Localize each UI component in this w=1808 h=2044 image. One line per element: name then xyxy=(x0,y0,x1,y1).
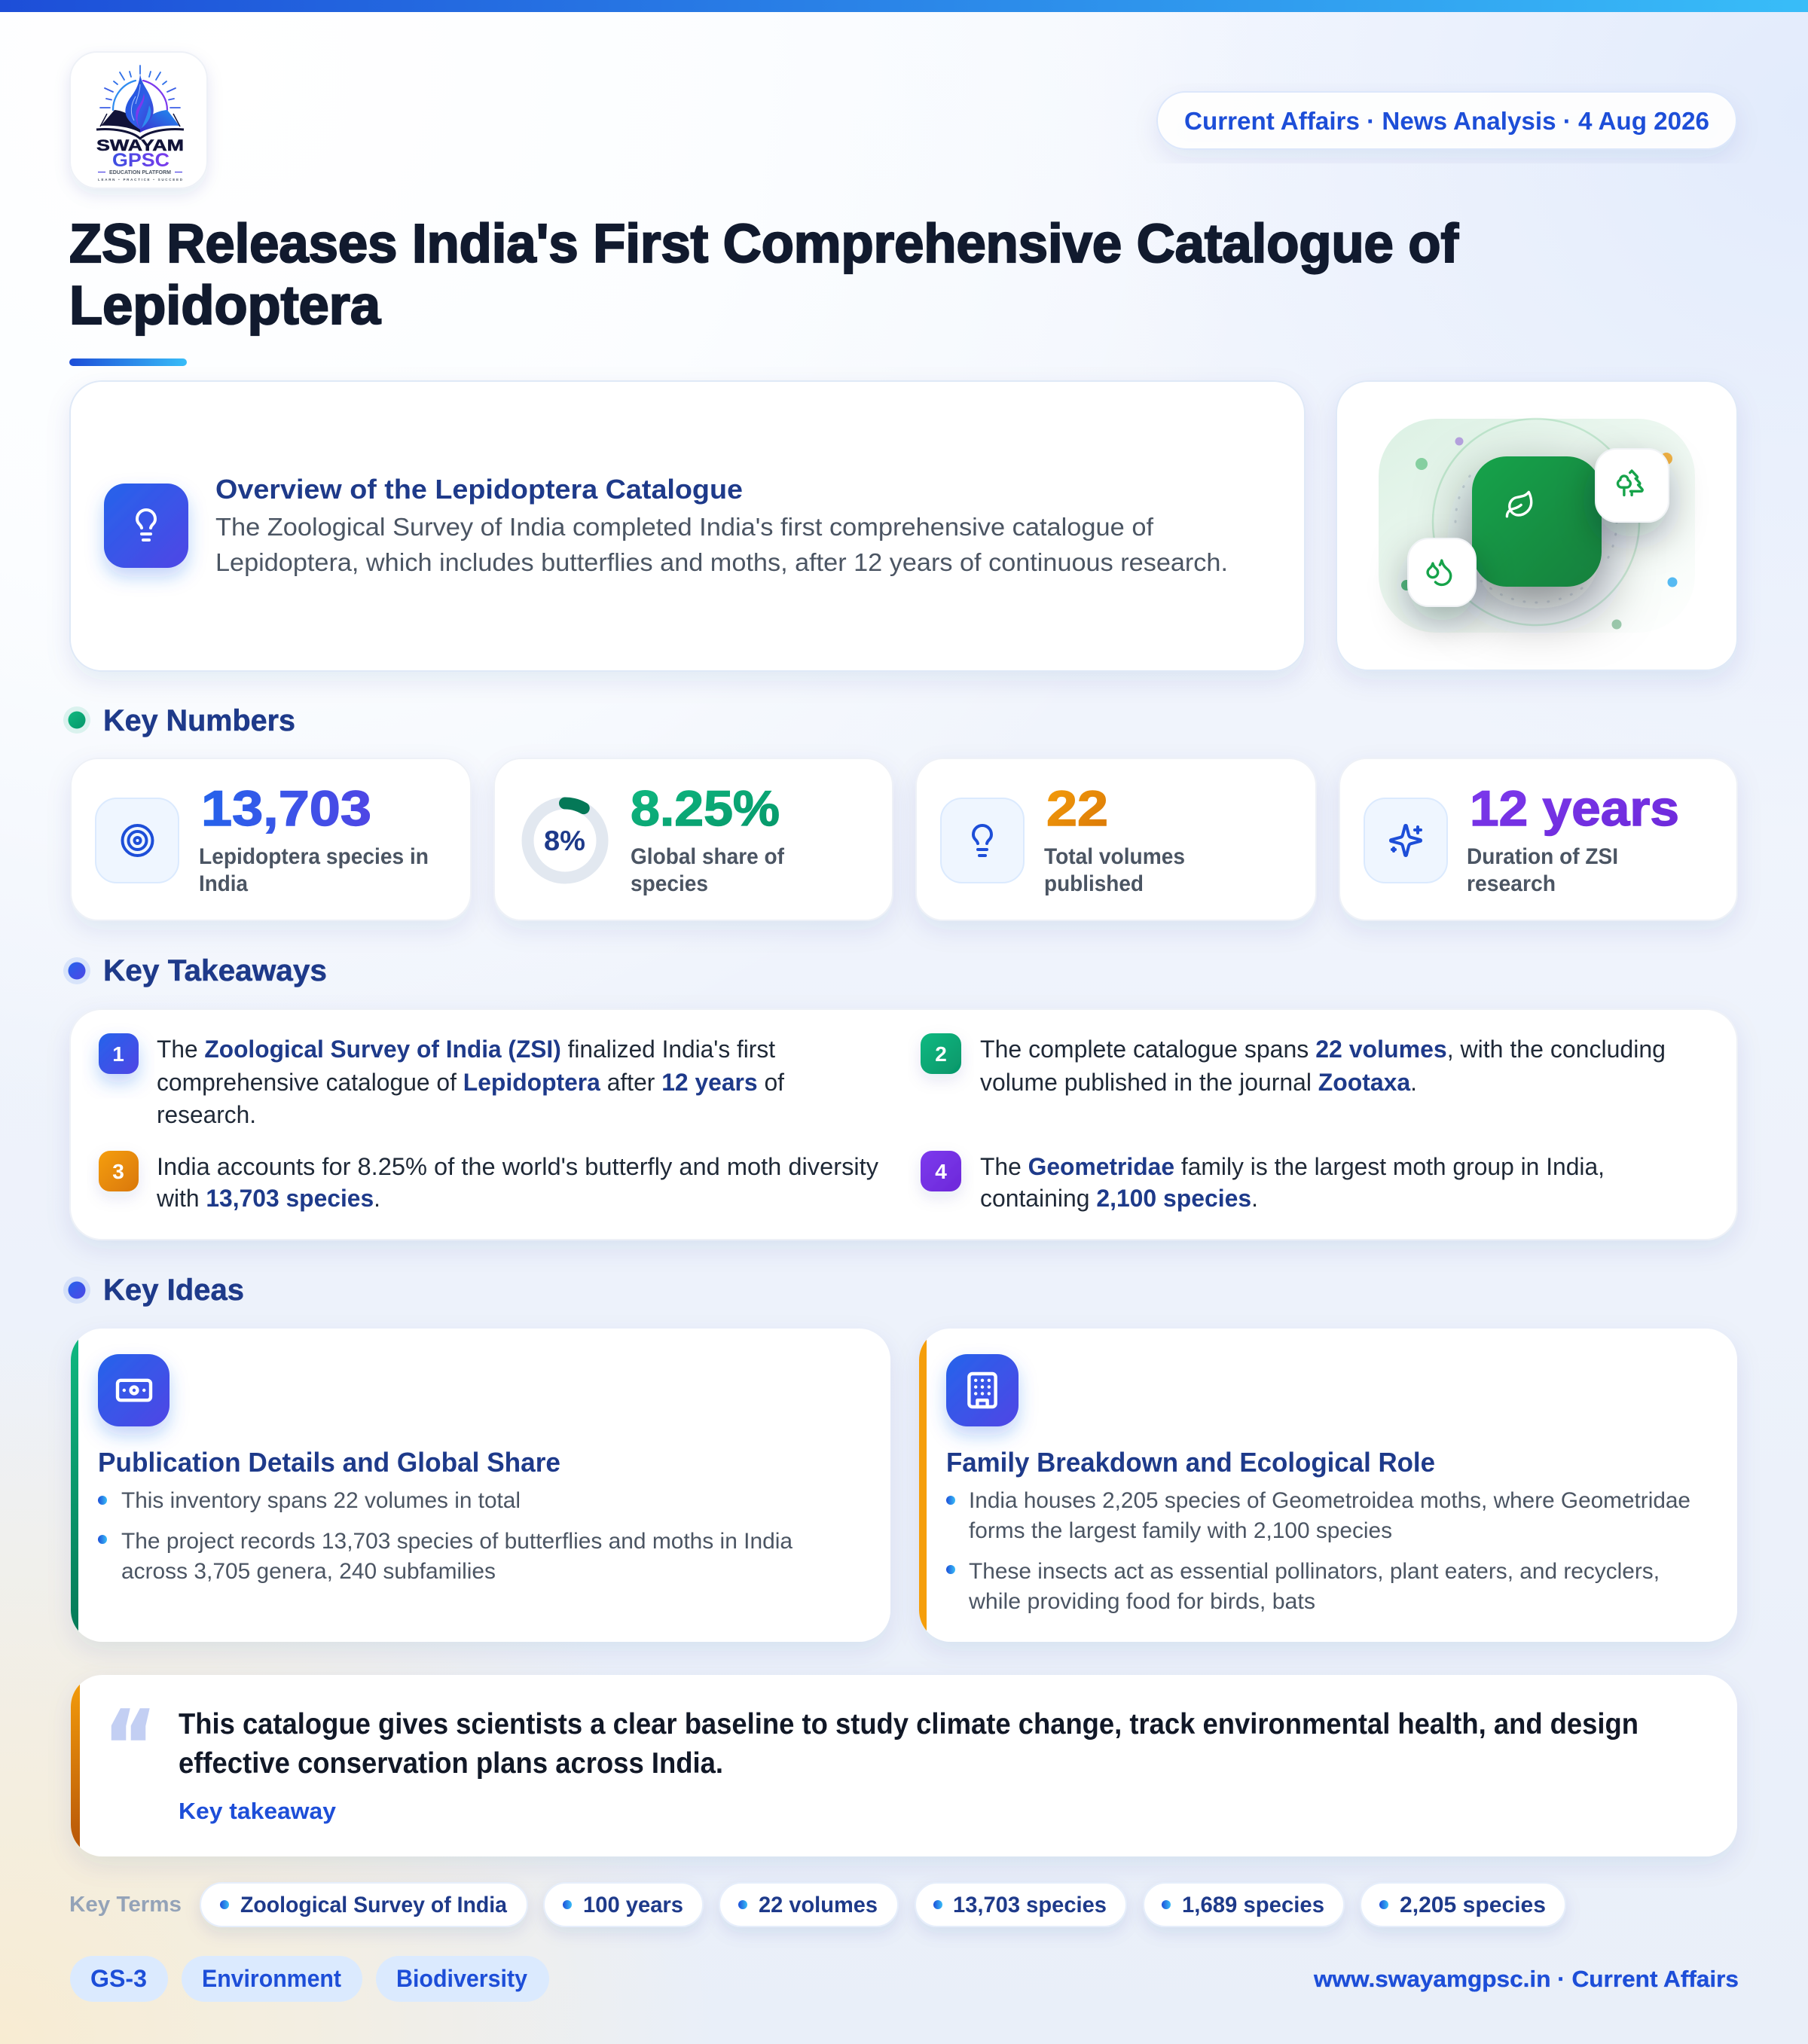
logo wordmark: SWAYAM xyxy=(96,137,184,154)
footer source line: www.swayamgpsc.in · Current Affairs xyxy=(1313,1966,1739,1992)
panel: family breakdown xyxy=(919,1329,1737,1642)
tag: Environment xyxy=(182,1956,362,2002)
value: 22 xyxy=(1046,780,1108,836)
icon: light bulb xyxy=(104,484,188,568)
icon: sun rays xyxy=(100,66,180,110)
logo wordmark: GPSC xyxy=(112,150,170,171)
label xyxy=(631,844,785,896)
logo card xyxy=(70,52,207,188)
quote text: This catalogue gives scientists a clear baseline to study climate change, track environmental health, and design xyxy=(179,1708,1638,1740)
label: research xyxy=(1467,871,1556,896)
bullet list: across 3,705 genera, 240 subfamilies xyxy=(121,1559,496,1584)
stat card: volumes xyxy=(916,758,1316,920)
icon: sparkles xyxy=(1364,798,1447,883)
water drops tile xyxy=(1408,538,1476,606)
stat card: global share xyxy=(494,758,893,920)
value: 12 years xyxy=(1470,780,1679,836)
heading: key numbers: Key Numbers xyxy=(103,704,295,737)
date pill xyxy=(1157,92,1736,149)
icon: open book xyxy=(96,110,184,139)
term chip: 100 years xyxy=(583,1893,683,1917)
term chip xyxy=(1144,1883,1344,1927)
key terms label: Key Terms xyxy=(69,1893,182,1917)
accent strip xyxy=(71,1684,80,1847)
icon: quotation mark: “ xyxy=(104,1691,156,1803)
takeaway 3 xyxy=(99,1151,878,1212)
takeaway 2: The complete catalogue spans 22 volumes, with the concluding xyxy=(980,1036,1666,1063)
tag: Environment: Environment xyxy=(202,1965,341,1992)
takeaway 1: 1 xyxy=(112,1042,124,1066)
bullet list xyxy=(946,1488,1690,1614)
label: India xyxy=(199,871,248,896)
overview body: The Zoological Survey of India completed India's first comprehensive catalogue of xyxy=(215,513,1154,541)
takeaway 1: research. xyxy=(157,1101,256,1128)
icon: flame xyxy=(125,74,154,130)
takeaway 4: The Geometridae family is the largest moth group in India, xyxy=(980,1153,1605,1180)
bullet list: The project records 13,703 species of butterflies and moths in India xyxy=(121,1529,793,1554)
logo wordmark: LEARN • PRACTICE • SUCCEED xyxy=(98,178,183,182)
term chip xyxy=(915,1883,1126,1927)
label: published xyxy=(1044,871,1144,896)
orbit rings xyxy=(1433,419,1639,625)
panel: nature illustration xyxy=(1336,381,1737,670)
term chip xyxy=(1361,1883,1565,1927)
label: Lepidoptera species in xyxy=(199,844,429,869)
tag: Biodiversity: Biodiversity xyxy=(396,1965,527,1992)
label: Total volumes xyxy=(1044,844,1185,869)
value: 13,703 xyxy=(201,780,371,836)
label xyxy=(199,844,429,896)
top accent bar xyxy=(0,0,1808,12)
overview body xyxy=(215,513,1228,576)
term chip xyxy=(544,1883,703,1927)
bullet list: while providing food for birds, bats xyxy=(968,1589,1315,1614)
takeaway 1: comprehensive catalogue of Lepidoptera after 12 years of xyxy=(157,1069,784,1096)
takeaway 3: 3 xyxy=(112,1160,124,1183)
term chip: 22 volumes xyxy=(759,1893,878,1917)
panel: overview xyxy=(70,381,1305,671)
takeaway 4: containing 2,100 species. xyxy=(980,1185,1258,1212)
icon: target xyxy=(96,798,179,883)
card heading: Family Breakdown and Ecological Role xyxy=(946,1447,1435,1478)
title underline xyxy=(69,358,187,366)
logo wordmark: EDUCATION PLATFORM xyxy=(109,170,171,175)
bullet list: forms the largest family with 2,100 species xyxy=(969,1518,1392,1543)
donut chart 8%: 8% xyxy=(544,825,585,856)
date pill: Current Affairs · News Analysis · 4 Aug 2026 xyxy=(1184,107,1709,135)
term chip: 13,703 species xyxy=(953,1893,1107,1917)
key terms row xyxy=(69,1883,1565,1927)
takeaway 1 xyxy=(99,1033,784,1128)
panel: publication details xyxy=(71,1329,890,1642)
donut chart 8% xyxy=(527,803,603,878)
decorative dots xyxy=(1401,437,1677,630)
takeaway 1: The Zoological Survey of India (ZSI) finalized India's first xyxy=(157,1036,775,1063)
title xyxy=(69,214,1459,336)
term chip xyxy=(719,1883,898,1927)
panel: key takeaways xyxy=(70,1009,1737,1240)
takeaway 2: 2 xyxy=(935,1042,947,1066)
logo wordmark xyxy=(96,137,184,182)
icon: banknote xyxy=(98,1354,170,1426)
bullet list xyxy=(98,1488,793,1584)
icon: building xyxy=(946,1354,1019,1426)
term chip xyxy=(200,1883,527,1927)
illustration backdrop xyxy=(1379,419,1695,633)
tag: Biodiversity xyxy=(376,1956,549,2002)
overview body: Lepidoptera, which includes butterflies and moths, after 12 years of continuous research. xyxy=(215,548,1228,576)
stat card: species xyxy=(71,758,471,920)
quote label: Key takeaway xyxy=(179,1798,337,1824)
term chip: Zoological Survey of India xyxy=(240,1893,507,1917)
icon: bulb xyxy=(941,798,1024,883)
takeaway 3: with 13,703 species. xyxy=(156,1185,380,1212)
panel: quote callout xyxy=(71,1675,1737,1856)
takeaway 2 xyxy=(921,1033,1666,1096)
title: ZSI Releases India's First Comprehensive Catalogue of xyxy=(69,214,1459,274)
bullet list: India houses 2,205 species of Geometroidea moths, where Geometridae xyxy=(969,1488,1690,1513)
heading: key takeaways: Key Takeaways xyxy=(103,954,327,987)
tree tile xyxy=(1596,449,1669,522)
card heading: Publication Details and Global Share xyxy=(98,1447,560,1478)
takeaway 4: 4 xyxy=(935,1160,947,1183)
label xyxy=(1467,844,1618,896)
term chip: 1,689 species xyxy=(1182,1893,1324,1917)
label: Duration of ZSI xyxy=(1467,844,1618,869)
quote text xyxy=(179,1708,1638,1780)
quote text: effective conservation plans across India. xyxy=(179,1747,723,1780)
accent strip xyxy=(71,1329,78,1642)
tag: GS-3 xyxy=(70,1956,168,2002)
term chip: 2,205 species xyxy=(1400,1893,1546,1917)
label: species xyxy=(631,871,708,896)
main green tile with leaf xyxy=(1472,456,1602,587)
bullet list: These insects act as essential pollinators, plant eaters, and recyclers, xyxy=(969,1559,1660,1584)
overview heading: Overview of the Lepidoptera Catalogue xyxy=(215,474,743,505)
stat card: duration xyxy=(1339,758,1737,920)
bullet list: This inventory spans 22 volumes in total xyxy=(121,1488,521,1513)
label xyxy=(1044,844,1185,896)
takeaway 2: volume published in the journal Zootaxa. xyxy=(980,1069,1417,1096)
heading: key ideas: Key Ideas xyxy=(103,1274,244,1307)
accent strip xyxy=(919,1329,927,1642)
value: 8.25% xyxy=(631,780,780,836)
takeaway 4 xyxy=(921,1151,1605,1212)
tag: GS-3: GS-3 xyxy=(90,1965,147,1992)
title: Lepidoptera xyxy=(69,276,381,336)
label: Global share of xyxy=(631,844,785,869)
takeaway 3: India accounts for 8.25% of the world's butterfly and moth diversity xyxy=(157,1153,878,1180)
